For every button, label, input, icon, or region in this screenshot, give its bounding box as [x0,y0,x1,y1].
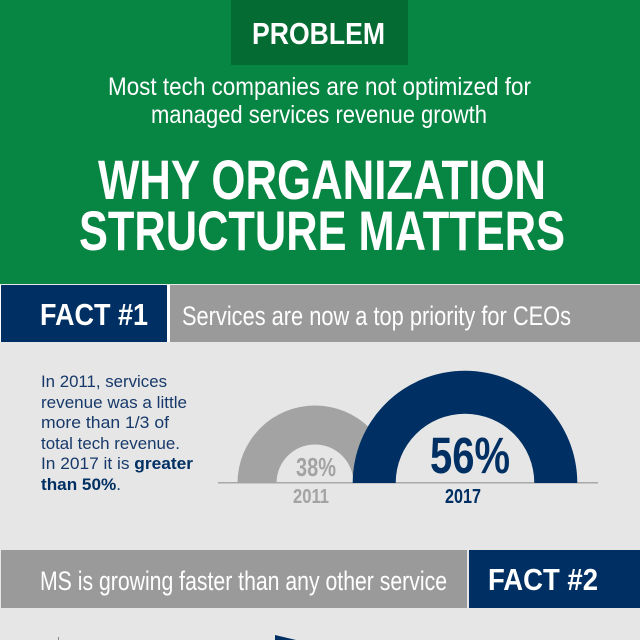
heading: problem tab [231,0,408,65]
text block: fact 1 description: revenue was a little [41,393,187,412]
panel: fact 2 banner: MS is growing faster than any other service [40,566,447,596]
text block: fact 1 description: more than 1/3 of [41,413,169,432]
text block: problem statement: Most tech companies are not optimized for [108,73,531,101]
chart item: 2017 gauge: 56% [430,427,510,484]
text block: fact 1 description: than 50%. [41,475,121,494]
text block: problem statement: managed services revenue growth [151,101,487,129]
chart item: 2011 gauge: 2011 [293,486,329,508]
chart item: 2011 gauge [238,405,392,508]
chart item: 2017 gauge [353,371,577,508]
text block: problem statement [108,73,531,129]
panel: fact 1 banner: FACT #1 [40,297,148,332]
panel: green problem header [0,0,640,284]
chart: top edge of next chart [58,635,296,640]
title [79,148,565,262]
panel: fact 1 banner [0,285,640,342]
panel: fact 2 banner: FACT #2 [488,562,598,597]
chart item: 2017 gauge: 2017 [445,486,481,508]
chart item: 2011 gauge: 38% [296,452,336,482]
text block: fact 1 description: In 2011, services [41,372,167,391]
text block: fact 1 description [41,372,193,494]
text block: fact 1 description: total tech revenue. [41,434,180,453]
heading: problem tab: PROBLEM [252,16,385,51]
panel: fact 2 banner [1,550,640,608]
chart: semicircle comparison 2011 vs 2017 [218,371,598,508]
text block: fact 1 description: In 2017 it is greater [41,454,193,473]
